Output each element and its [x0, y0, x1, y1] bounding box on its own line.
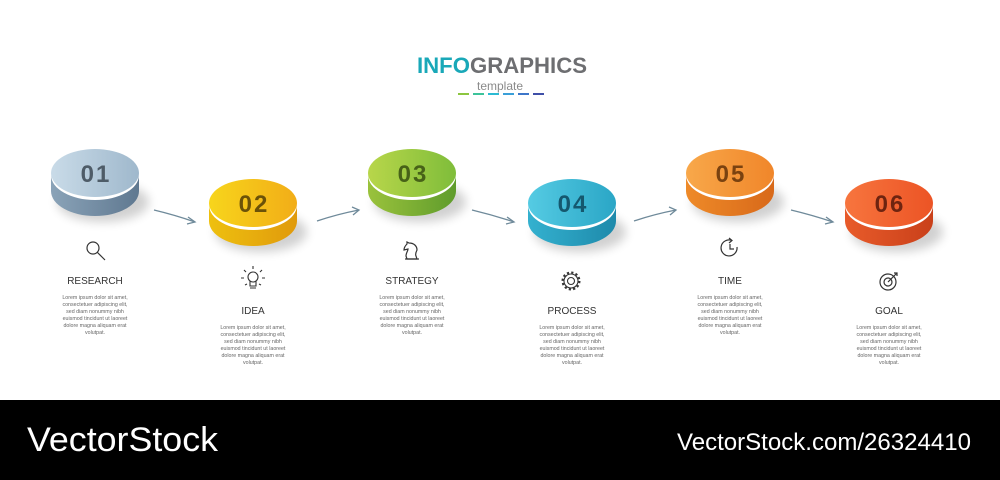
body texts: euismod tincidunt ut laoreet — [380, 316, 445, 322]
icon: chess knight — [404, 242, 419, 259]
body texts: sed diam nonummy nibh — [543, 339, 601, 345]
icon: magnifier — [87, 242, 105, 260]
footer bar: VectorStock.com/26324410 — [677, 429, 971, 456]
body texts: dolore magna aliquam erat — [540, 353, 604, 359]
body texts: euismod tincidunt ut laoreet — [63, 316, 128, 322]
title: INFOGRAPHICS — [417, 53, 587, 78]
step texts: GOAL — [875, 306, 903, 317]
disc 03 — [368, 149, 466, 222]
body texts: Lorem ipsum dolor sit amet, — [539, 325, 605, 331]
disc 06: 06 — [875, 191, 905, 218]
body texts: Lorem ipsum dolor sit amet, — [856, 325, 922, 331]
icon: gear — [562, 272, 580, 290]
body texts: euismod tincidunt ut laoreet — [698, 316, 763, 322]
body texts: consectetuer adipiscing elit, — [856, 332, 922, 338]
step texts: TIME — [718, 276, 742, 287]
disc 01 — [51, 149, 149, 222]
disc 05 — [686, 149, 784, 222]
step texts — [67, 276, 903, 317]
body texts: sed diam nonummy nibh — [224, 339, 282, 345]
body texts: volutpat. — [402, 330, 422, 336]
body texts: volutpat. — [562, 360, 582, 366]
footer bar: VectorStock — [27, 421, 219, 459]
body texts: consectetuer adipiscing elit, — [697, 302, 763, 308]
body texts: dolore magna aliquam erat — [380, 323, 444, 329]
disc 01: 01 — [81, 161, 111, 188]
body texts: Lorem ipsum dolor sit amet, — [697, 295, 763, 301]
icon: target — [880, 273, 897, 290]
body texts: consectetuer adipiscing elit, — [379, 302, 445, 308]
body texts: consectetuer adipiscing elit, — [62, 302, 128, 308]
disc 02 — [209, 179, 307, 252]
title — [417, 53, 587, 95]
body texts: consectetuer adipiscing elit, — [539, 332, 605, 338]
body texts: euismod tincidunt ut laoreet — [540, 346, 605, 352]
arrows — [154, 207, 833, 224]
body texts: dolore magna aliquam erat — [221, 353, 285, 359]
body texts: Lorem ipsum dolor sit amet, — [220, 325, 286, 331]
body texts: euismod tincidunt ut laoreet — [857, 346, 922, 352]
disc 06 — [845, 179, 943, 252]
body texts: dolore magna aliquam erat — [857, 353, 921, 359]
step texts: STRATEGY — [385, 276, 439, 287]
body texts: Lorem ipsum dolor sit amet, — [379, 295, 445, 301]
step texts: RESEARCH — [67, 276, 123, 287]
title: template — [477, 79, 523, 93]
step texts: PROCESS — [548, 306, 597, 317]
footer bar — [0, 400, 1000, 480]
disc 04 — [528, 179, 626, 252]
body texts: volutpat. — [879, 360, 899, 366]
body texts: consectetuer adipiscing elit, — [220, 332, 286, 338]
body texts: dolore magna aliquam erat — [698, 323, 762, 329]
disc 04: 04 — [558, 191, 588, 218]
body texts: sed diam nonummy nibh — [860, 339, 918, 345]
body texts: sed diam nonummy nibh — [701, 309, 759, 315]
disc 03: 03 — [398, 161, 428, 188]
disc 05: 05 — [716, 161, 746, 188]
disc 02: 02 — [239, 191, 269, 218]
body texts: euismod tincidunt ut laoreet — [221, 346, 286, 352]
body texts: dolore magna aliquam erat — [63, 323, 127, 329]
step texts: IDEA — [241, 306, 265, 317]
body texts — [62, 295, 922, 366]
body texts: sed diam nonummy nibh — [66, 309, 124, 315]
body texts: volutpat. — [85, 330, 105, 336]
body texts: Lorem ipsum dolor sit amet, — [62, 295, 128, 301]
body texts: sed diam nonummy nibh — [383, 309, 441, 315]
body texts: volutpat. — [243, 360, 263, 366]
icon: clock arrow — [721, 238, 737, 256]
body texts: volutpat. — [720, 330, 740, 336]
icon: bulb — [241, 266, 265, 288]
